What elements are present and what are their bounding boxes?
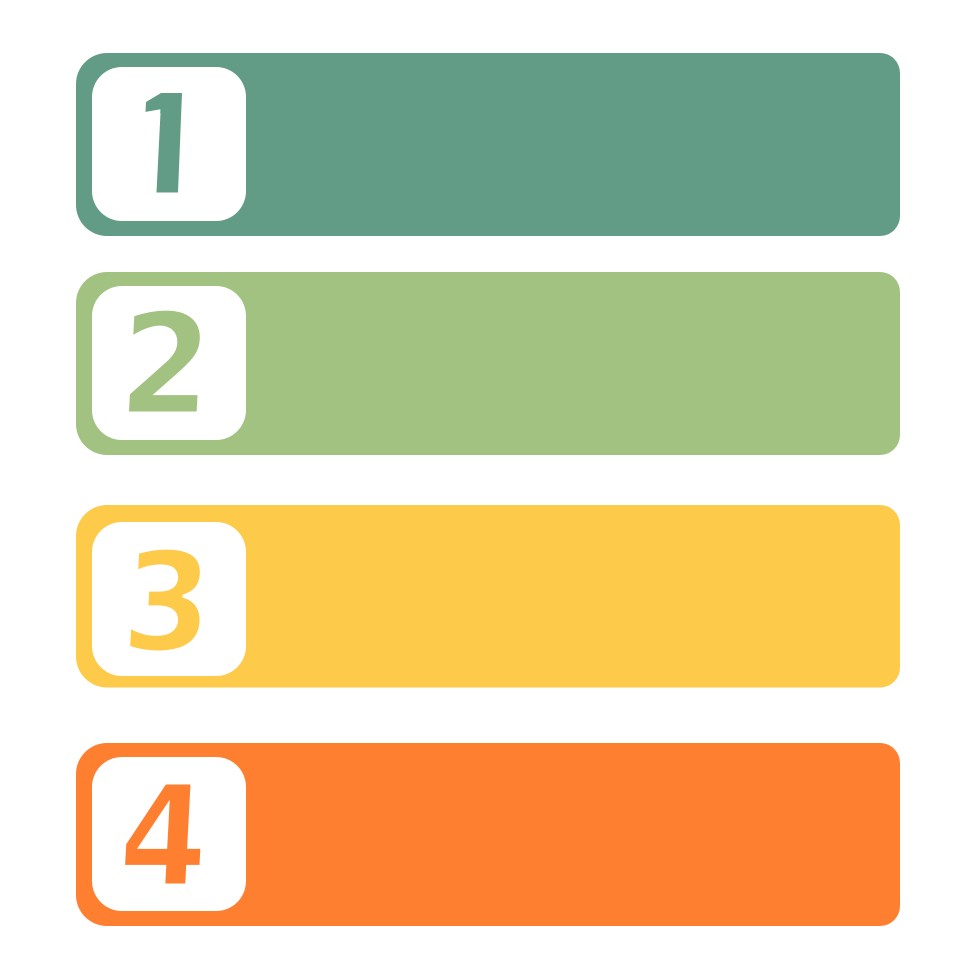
- panel: row 1: [76, 53, 900, 236]
- number 3: 3: [118, 523, 216, 683]
- number 1: 1: [109, 65, 227, 228]
- number 4: 4: [115, 755, 212, 918]
- panel: row 3: [76, 505, 900, 688]
- number 2: 2: [115, 284, 216, 447]
- panel: row 2: [76, 272, 900, 455]
- panel: row 4: [76, 743, 900, 926]
